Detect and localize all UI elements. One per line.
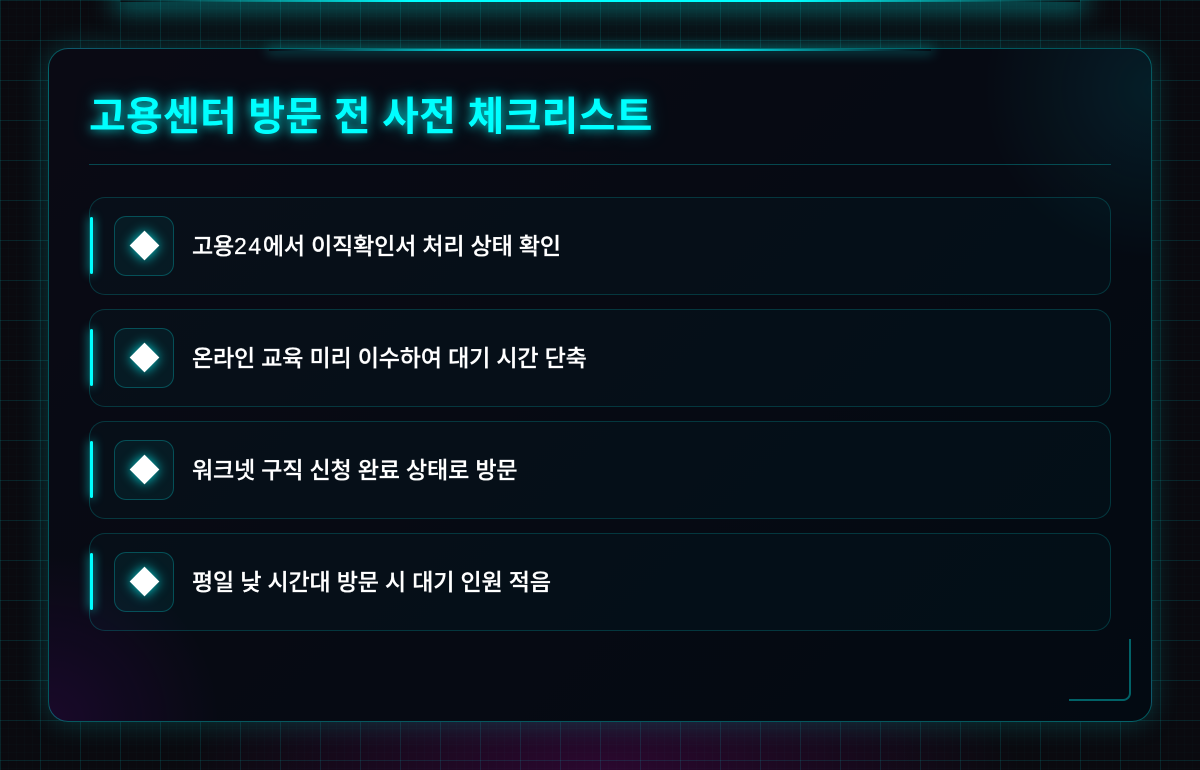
item text: 워크넷 구직 신청 완료 상태로 방문 xyxy=(192,457,517,483)
item text: 평일 낮 시간대 방문 시 대기 인원 적음 xyxy=(192,569,551,595)
icon: diamond xyxy=(114,440,174,500)
title: 고용센터 방문 전 사전 체크리스트 xyxy=(89,95,653,139)
checklist item 4 xyxy=(89,533,1111,631)
checklist item 1 xyxy=(89,197,1111,295)
icon: diamond xyxy=(114,552,174,612)
icon: diamond xyxy=(114,328,174,388)
item text: 고용24에서 이직확인서 처리 상태 확인 xyxy=(192,233,561,259)
checklist item 2 xyxy=(89,309,1111,407)
icon: diamond xyxy=(114,216,174,276)
checklist item 3 xyxy=(89,421,1111,519)
item text: 온라인 교육 미리 이수하여 대기 시간 단축 xyxy=(192,345,587,371)
